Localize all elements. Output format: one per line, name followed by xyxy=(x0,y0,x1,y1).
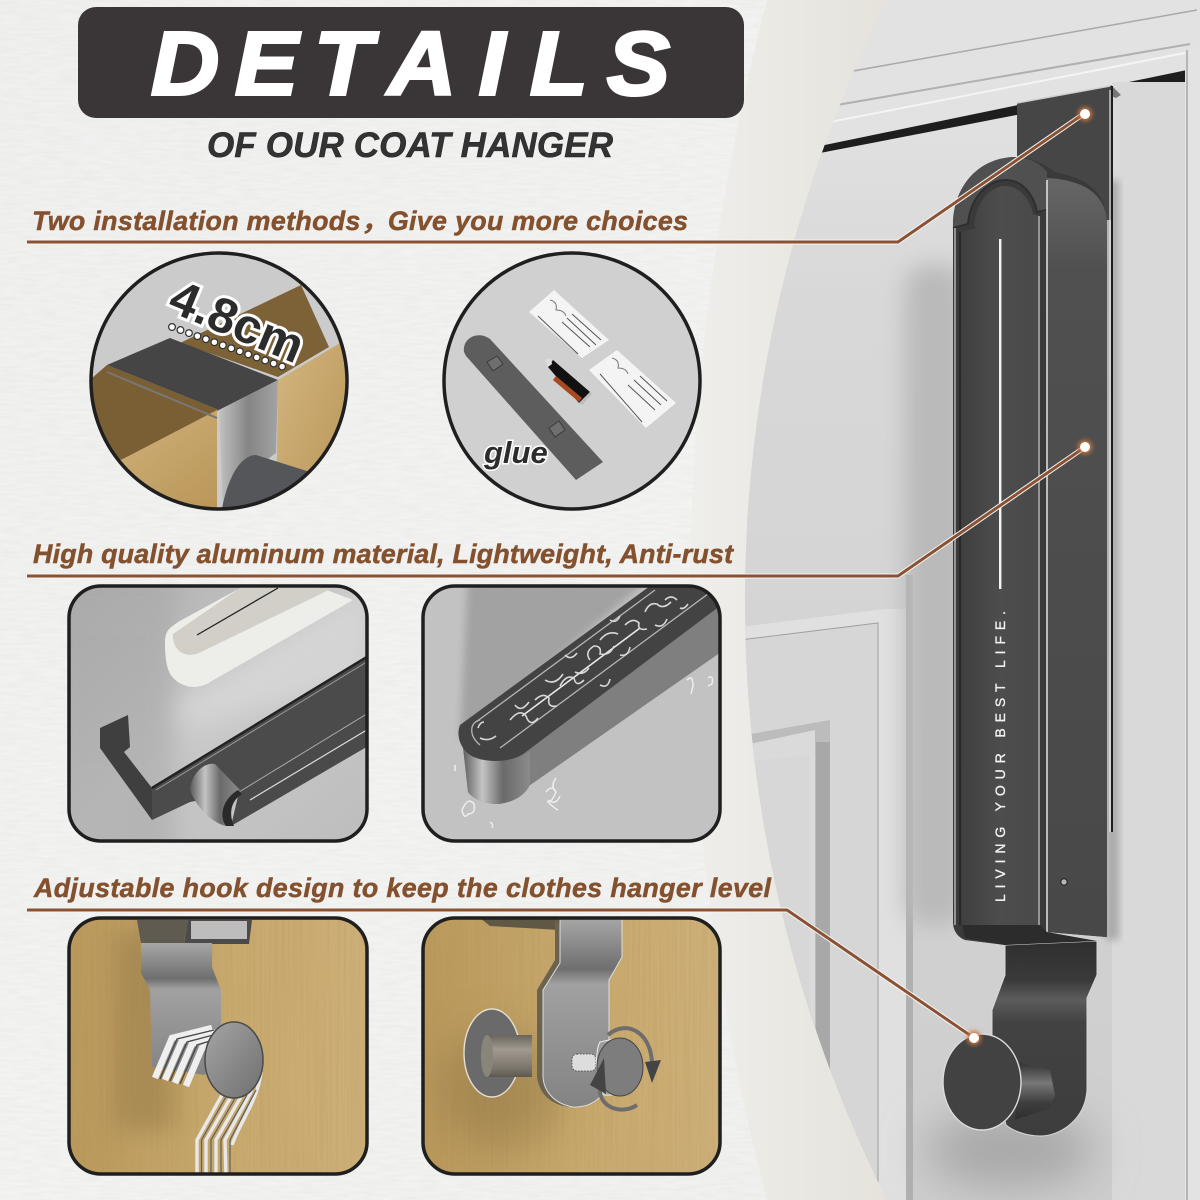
panel: adjustable screw xyxy=(423,918,720,1174)
hook knob xyxy=(943,1034,1021,1130)
white bar xyxy=(165,586,353,687)
door raised panel lower xyxy=(740,575,913,1200)
small hole xyxy=(1061,879,1067,885)
dimension dots highlight xyxy=(172,327,289,369)
title text: DETAILS xyxy=(151,13,670,114)
knob xyxy=(205,1022,263,1098)
hanging wire shading xyxy=(202,1090,256,1176)
mounting plate xyxy=(464,335,603,480)
callout dot: bottom xyxy=(967,1031,981,1045)
callout dot: middle xyxy=(1078,440,1092,454)
right knob xyxy=(596,1037,618,1096)
subtitle: OF OUR COAT HANGER xyxy=(207,126,614,165)
door right frame xyxy=(1112,50,1200,1200)
bracket xyxy=(537,920,570,1107)
arrow heads xyxy=(590,1058,661,1094)
front face edge lines xyxy=(955,180,1047,932)
top bracket xyxy=(1017,85,1121,832)
front face xyxy=(961,186,1040,925)
tagline: LIVING YOUR BEST LIFE. xyxy=(992,611,1008,902)
beige curved band xyxy=(690,0,1200,1200)
right side face xyxy=(1047,178,1107,937)
hook stem xyxy=(1015,1063,1055,1120)
hook bracket xyxy=(141,943,221,1075)
product: over-door coat hanger xyxy=(943,85,1121,1136)
water droplets on bar xyxy=(478,597,688,740)
dimension dots xyxy=(172,327,289,369)
water droplets on surface xyxy=(455,677,712,828)
panel: water resistant bar xyxy=(423,570,724,841)
glue tube xyxy=(545,358,592,405)
callout line: bottom xyxy=(27,910,981,1045)
dimension label: 4.8cm xyxy=(162,270,312,374)
dark hanger bar xyxy=(100,655,370,826)
callout line: middle xyxy=(27,440,1092,576)
heading: installation: Two installation methods，Give you more choices xyxy=(32,206,688,236)
top cap highlight xyxy=(953,157,1047,228)
door photo background xyxy=(745,9,1198,1200)
title plate xyxy=(78,7,744,118)
white slit xyxy=(999,239,1001,589)
back disc xyxy=(464,1009,520,1097)
hanger drop shadow xyxy=(905,180,1119,1188)
plate tabs xyxy=(487,356,565,437)
lower hook arm xyxy=(992,941,1097,1136)
callout dot: top xyxy=(1078,107,1092,121)
main body xyxy=(953,157,1107,945)
callout line: top xyxy=(27,107,1092,242)
wire shading xyxy=(160,1030,220,1084)
rotation arrows xyxy=(600,1028,652,1110)
bottom ledge xyxy=(962,925,1097,945)
bar side xyxy=(462,603,724,804)
panel: hook with hanger wires xyxy=(69,918,367,1176)
wires over hook xyxy=(155,1028,222,1086)
instruction card 2 xyxy=(589,350,676,428)
heading: material: High quality aluminum material, Lightweight, Anti-rust xyxy=(33,539,734,569)
hanging wires xyxy=(197,1072,261,1176)
circle: door width 4.8cm xyxy=(80,253,347,515)
front face outline xyxy=(953,180,1047,228)
panel: white and grey bars xyxy=(67,584,369,843)
bar top face xyxy=(458,586,724,761)
heading: adjustable hook: Adjustable hook design to keep the clothes hanger level xyxy=(33,873,772,903)
screw xyxy=(572,1054,596,1071)
door frame top xyxy=(822,9,1198,153)
stem xyxy=(487,1035,532,1077)
circle: glue kit xyxy=(444,253,700,509)
glue label: glue xyxy=(483,435,548,470)
instruction card 1 xyxy=(529,290,609,358)
